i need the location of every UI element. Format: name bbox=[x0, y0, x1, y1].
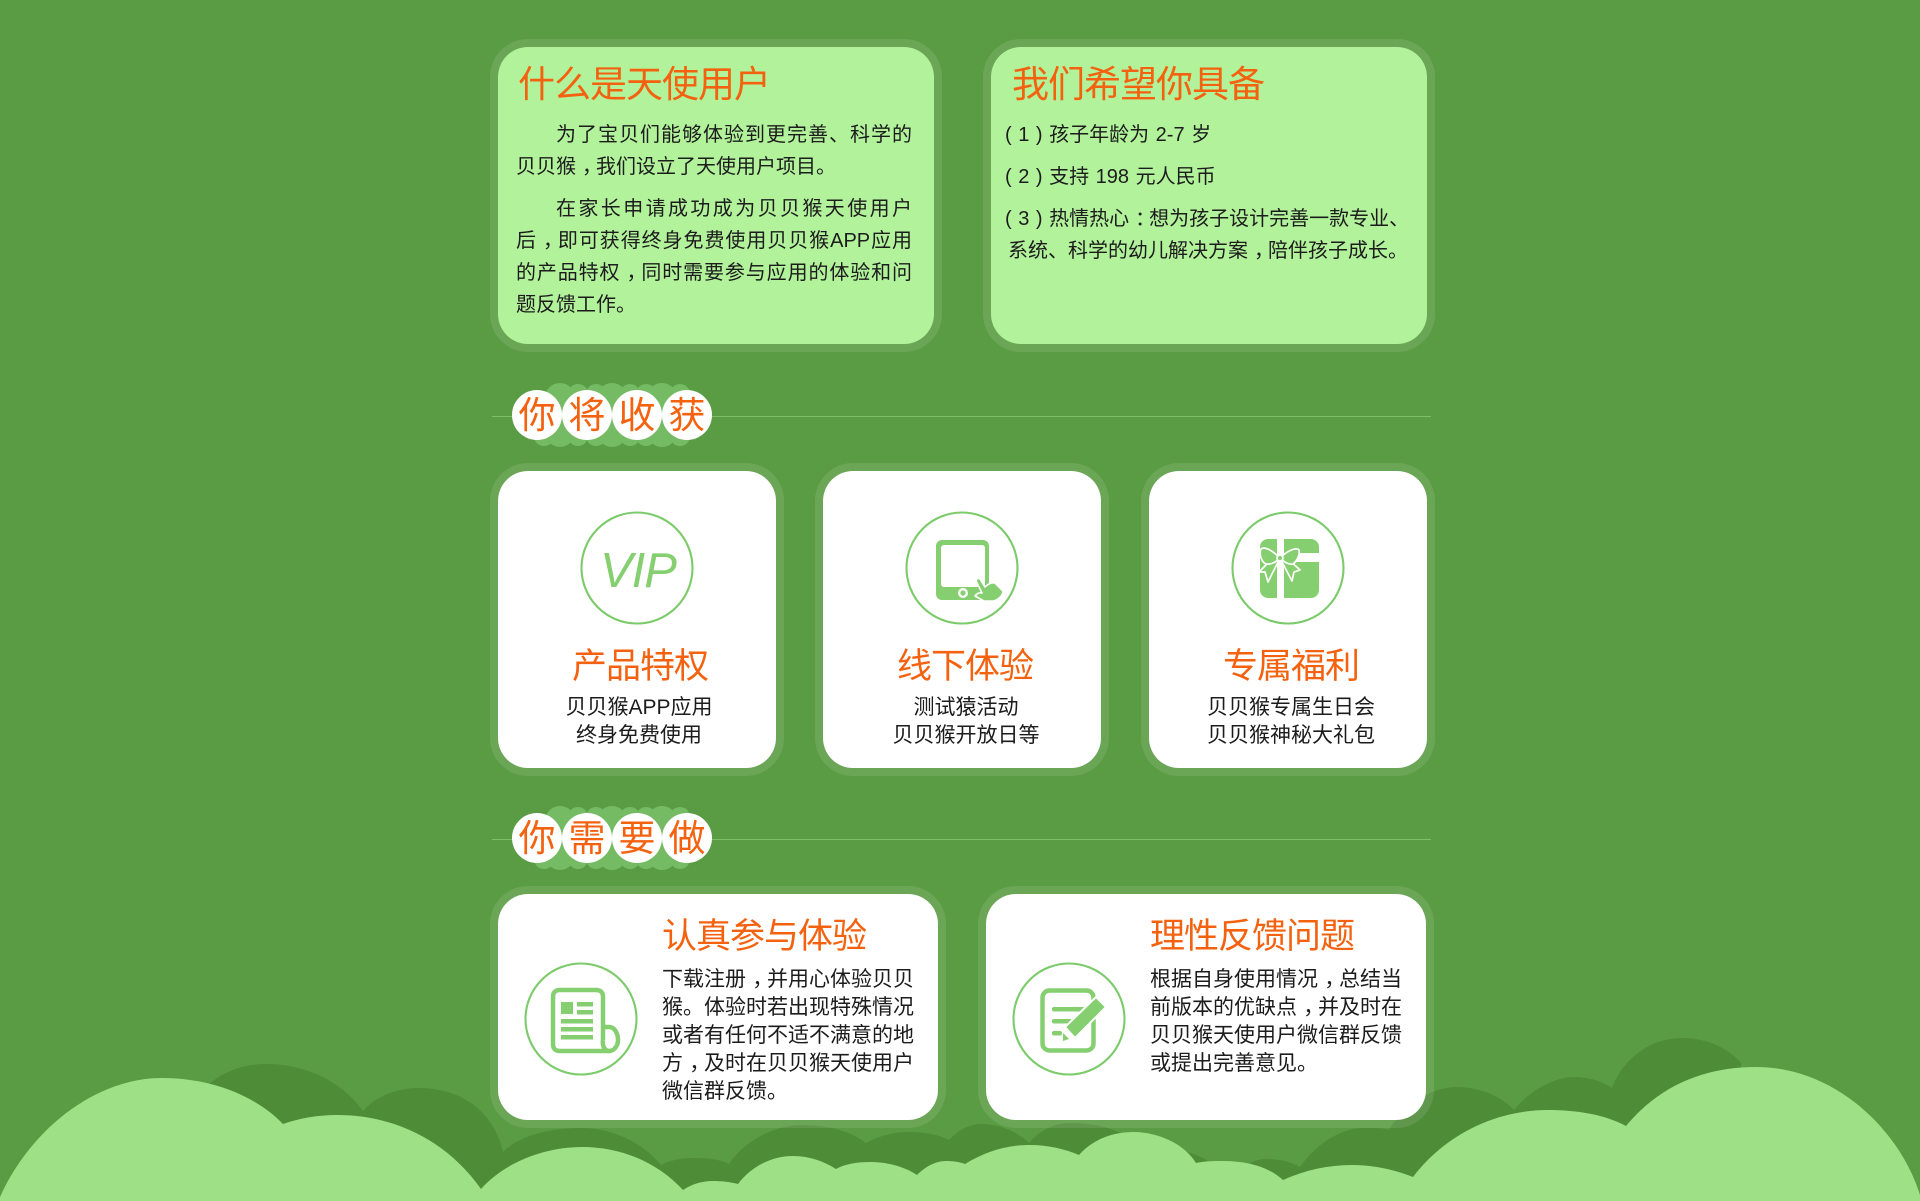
text block: give rational feedback description: 贝贝猴天使用户微信群反馈 bbox=[1150, 1024, 1402, 1047]
text block: experience carefully description: 微信群反馈。 bbox=[662, 1080, 788, 1103]
text block: angel user description: 贝贝猴 ，我们设立了天使用户项目。 bbox=[516, 156, 836, 178]
section heading: what you will gain: 收 bbox=[618, 395, 656, 436]
text block: exclusive benefits description bbox=[1207, 696, 1375, 747]
heading: give rational feedback: 理性反馈问题 bbox=[1150, 917, 1354, 956]
text block: give rational feedback description: 前版本的优缺点 ，并及时在 bbox=[1150, 996, 1402, 1019]
section heading: what you will gain: 将 bbox=[568, 395, 606, 436]
text block: angel user description: 后 ，即可获得终身免费使用贝贝猴APP应用 bbox=[516, 230, 912, 252]
text block: experience carefully description bbox=[662, 968, 914, 1103]
text block: angel user description: 题反馈工作。 bbox=[516, 294, 636, 316]
section heading: what you will gain: 你 bbox=[518, 395, 556, 436]
heading: product privileges: 产品特权 bbox=[572, 647, 708, 686]
text block: offline experience description: 贝贝猴开放日等 bbox=[892, 724, 1040, 747]
text block: requirements list: ( 1 ) 孩子年龄为 2-7 岁 bbox=[1005, 124, 1211, 146]
text block: exclusive benefits description: 贝贝猴专属生日会 bbox=[1207, 696, 1375, 719]
heading: offline experience: 线下体验 bbox=[897, 647, 1033, 686]
text block: angel user description: 的产品特权 ，同时需要参与应用的体验和问 bbox=[516, 262, 912, 284]
text block: product privileges description bbox=[565, 696, 713, 747]
icon: tablet with pointing hand bbox=[905, 512, 1019, 624]
icon: VIP: VIP bbox=[600, 544, 677, 598]
heading: what is an angel user: 什么是天使用户 bbox=[518, 64, 770, 105]
text block: experience carefully description: 猴。体验时若出现特殊情况 bbox=[662, 996, 914, 1019]
text block: requirements list bbox=[1005, 124, 1409, 262]
icon: VIP bbox=[580, 512, 694, 624]
card: exclusive benefits bbox=[1141, 463, 1435, 776]
card: give rational feedback bbox=[978, 886, 1434, 1128]
section heading: what you need to do bbox=[492, 806, 1431, 870]
heading: what we hope you have: 我们希望你具备 bbox=[1012, 64, 1264, 105]
text block: offline experience description bbox=[892, 696, 1040, 747]
section heading: what you will gain bbox=[492, 383, 1431, 447]
section heading: what you need to do: 做 bbox=[668, 818, 706, 859]
section heading: what you will gain: 获 bbox=[668, 395, 706, 436]
icon: gift box bbox=[1231, 512, 1345, 624]
text block: give rational feedback description: 根据自身使用情况 ，总结当 bbox=[1150, 968, 1402, 991]
text block: experience carefully description: 下载注册 ，并用心体验贝贝 bbox=[662, 968, 914, 991]
card: experience carefully bbox=[490, 886, 946, 1128]
text block: requirements list: ( 3 ) 热情热心 ：想为孩子设计完善一款专业、 bbox=[1005, 208, 1409, 230]
text block: experience carefully description: 或者有任何不适不满意的地 bbox=[662, 1024, 914, 1047]
text block: angel user description: 在家长申请成功成为贝贝猴天使用户 bbox=[556, 198, 912, 220]
heading: exclusive benefits: 专属福利 bbox=[1223, 647, 1359, 686]
text block: angel user description bbox=[516, 124, 912, 316]
text block: give rational feedback description: 或提出完善意见。 bbox=[1150, 1052, 1318, 1075]
section heading: what you need to do: 要 bbox=[618, 818, 656, 859]
icon: newspaper scroll bbox=[524, 962, 638, 1076]
text block: product privileges description: 贝贝猴APP应用 bbox=[565, 696, 713, 719]
text block: requirements list: 系统、科学的幼儿解决方案 ，陪伴孩子成长。 bbox=[1008, 240, 1408, 262]
text block: product privileges description: 终身免费使用 bbox=[576, 724, 702, 747]
section heading: what you need to do: 你 bbox=[518, 818, 556, 859]
card: product privileges bbox=[490, 463, 784, 776]
text block: give rational feedback description bbox=[1150, 968, 1402, 1075]
text block: angel user description: 为了宝贝们能够体验到更完善、科学的 bbox=[556, 124, 912, 146]
panel: what we hope you have bbox=[983, 39, 1435, 352]
card: offline experience bbox=[815, 463, 1109, 776]
panel: what is an angel user bbox=[490, 39, 942, 352]
text block: exclusive benefits description: 贝贝猴神秘大礼包 bbox=[1207, 724, 1375, 747]
text block: offline experience description: 测试猿活动 bbox=[914, 696, 1018, 719]
heading: experience carefully: 认真参与体验 bbox=[662, 917, 866, 956]
icon: note with pencil bbox=[1012, 962, 1126, 1076]
section heading: what you need to do: 需 bbox=[568, 818, 606, 859]
text block: requirements list: ( 2 ) 支持 198 元人民币 bbox=[1005, 166, 1216, 188]
text block: experience carefully description: 方 ，及时在贝贝猴天使用户 bbox=[662, 1052, 914, 1075]
